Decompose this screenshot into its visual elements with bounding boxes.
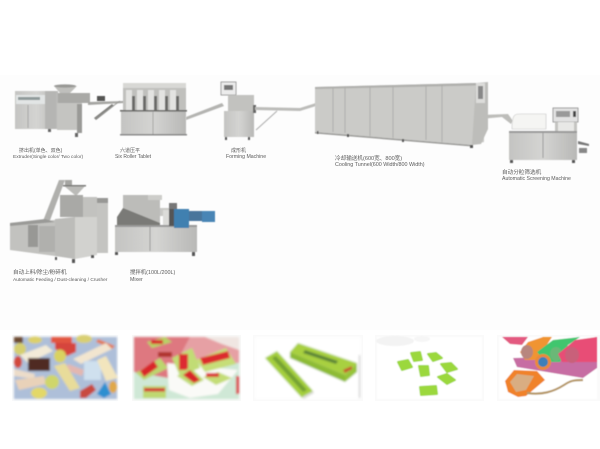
label: forming machine: 成形机 — [231, 147, 246, 154]
photo: watermelon gum in white bowl — [132, 335, 241, 401]
label: mixer: 搅拌机(100L/200L) — [130, 268, 175, 276]
conveyor: tablet to forming — [186, 103, 224, 120]
machine: automatic screening machine — [509, 108, 589, 163]
machine: six roller tablet — [120, 83, 187, 136]
label: feeding, dust-cleaning, crusher: 自动上料/除尘/粉碎机 — [13, 268, 67, 276]
machine: cooling tunnel — [315, 82, 488, 148]
label: forming machine: Forming Machine — [226, 154, 266, 160]
label: automatic screening machine — [502, 168, 571, 182]
conveyor: tunnel to screening — [480, 114, 513, 124]
label: mixer — [130, 268, 175, 283]
label: cooling tunnel: 冷却输送机(600宽、800宽) — [335, 154, 402, 162]
photo: green gum pack and stick — [253, 335, 363, 401]
label: six roller tablet: Six Roller Tablet — [115, 154, 152, 160]
label: extruder: Extruder(Single color/ Two color) — [13, 154, 84, 160]
machine: forming machine — [221, 82, 316, 140]
label: forming machine — [226, 147, 266, 160]
photo: green gum pellets on white — [375, 335, 484, 401]
label: six roller tablet — [115, 147, 152, 160]
label: feeding, dust-cleaning, crusher — [13, 268, 108, 283]
label: six roller tablet: 六道压平 — [120, 147, 140, 154]
label: cooling tunnel — [335, 154, 425, 168]
label: feeding, dust-cleaning, crusher: Automatic Feeding / Dust-cleaning / Crusher — [13, 277, 108, 283]
label: cooling tunnel: Cooling Tunnel(600 Width/800 Width) — [335, 162, 425, 168]
label: extruder — [13, 147, 84, 160]
machine: extruder — [15, 84, 124, 137]
label: extruder: 挤出机(单色、双色) — [19, 147, 63, 154]
label: mixer: Mixer — [130, 277, 143, 283]
machine: automatic feeding, dust-cleaning, crusher — [10, 180, 108, 263]
label: automatic screening machine: Automatic Screening Machine — [502, 176, 571, 182]
photo: colorful pizza candy display box — [497, 335, 600, 401]
machine: mixer — [115, 195, 215, 256]
label: automatic screening machine: 自动分粒筛选机 — [502, 168, 542, 176]
photo: assorted gum pieces — [12, 335, 118, 401]
